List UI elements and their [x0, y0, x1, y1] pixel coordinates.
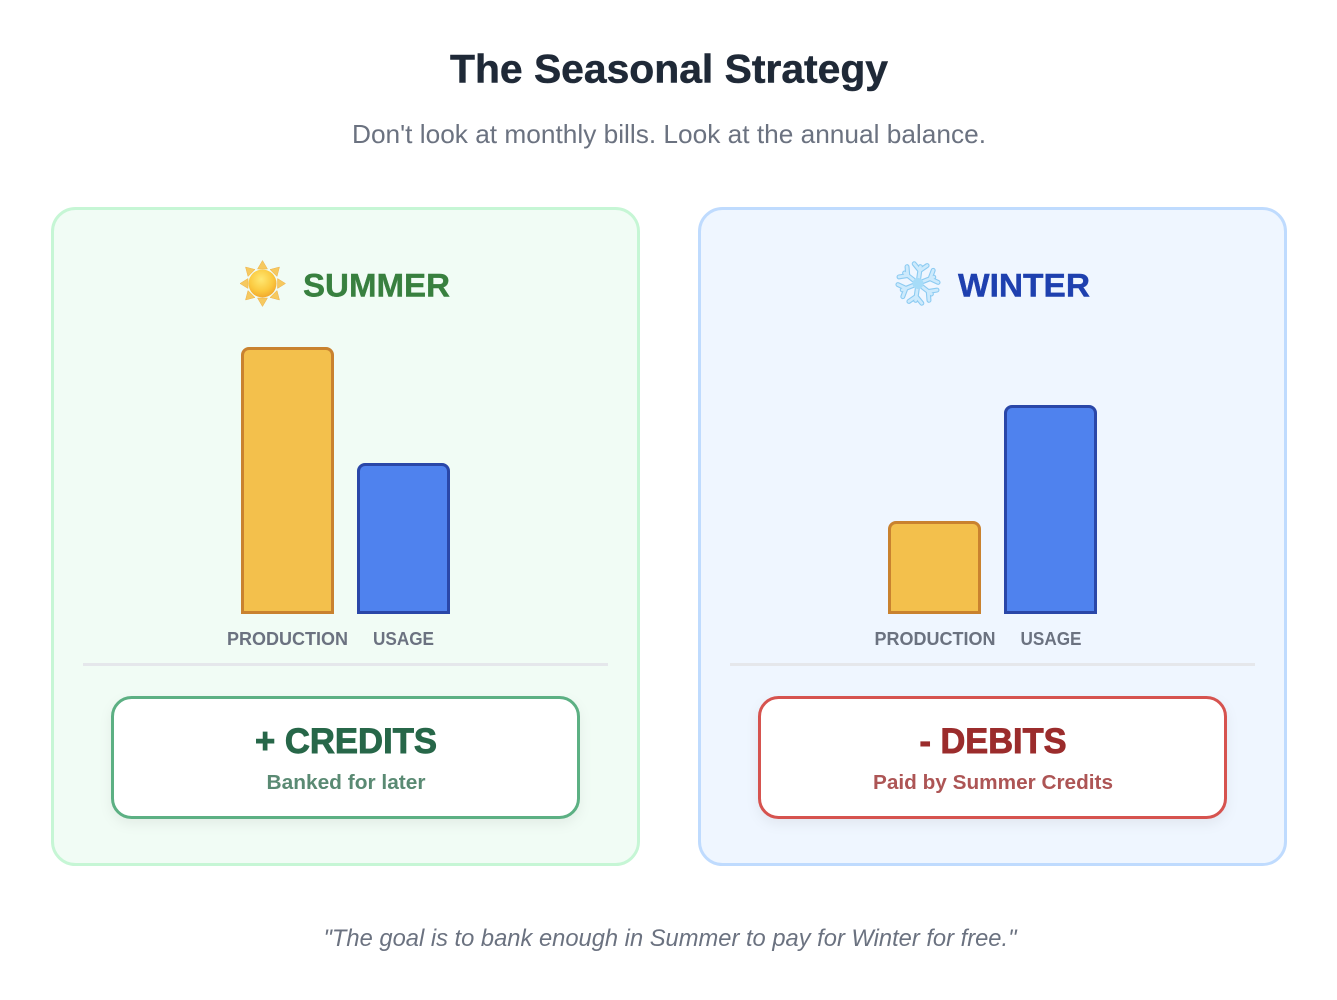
icon: sun — [240, 260, 286, 306]
label: production: PRODUCTION — [874, 629, 996, 649]
heading: winter: WINTER — [958, 268, 1090, 304]
panel: summer — [52, 208, 638, 864]
label: usage: USAGE — [373, 629, 434, 649]
callout text: debits: Paid by Summer Credits — [873, 772, 1113, 794]
callout text: credits: Banked for later — [266, 772, 426, 794]
panel: winter — [700, 208, 1286, 864]
callout: debits — [760, 698, 1226, 818]
subtitle: Don't look at monthly bills. Look at the annual balance. — [352, 119, 986, 149]
footer quote: "The goal is to bank enough in Summer to pay for Winter for free." — [324, 925, 1018, 952]
bar chart: winter — [874, 406, 1096, 649]
callout heading: debits: - DEBITS — [920, 722, 1066, 761]
callout heading: credits: + CREDITS — [255, 722, 437, 761]
bar: summer production — [242, 348, 332, 612]
label: usage: USAGE — [1020, 629, 1082, 649]
bar: winter production — [890, 522, 980, 612]
bar: winter usage — [1006, 406, 1096, 612]
icon: snowflake — [896, 262, 940, 305]
label: production: PRODUCTION — [227, 629, 348, 649]
title: The Seasonal Strategy — [450, 48, 889, 92]
bar: summer usage — [358, 464, 448, 612]
callout: credits — [112, 698, 578, 818]
heading: summer: SUMMER — [303, 268, 450, 304]
bar chart: summer — [227, 348, 448, 649]
